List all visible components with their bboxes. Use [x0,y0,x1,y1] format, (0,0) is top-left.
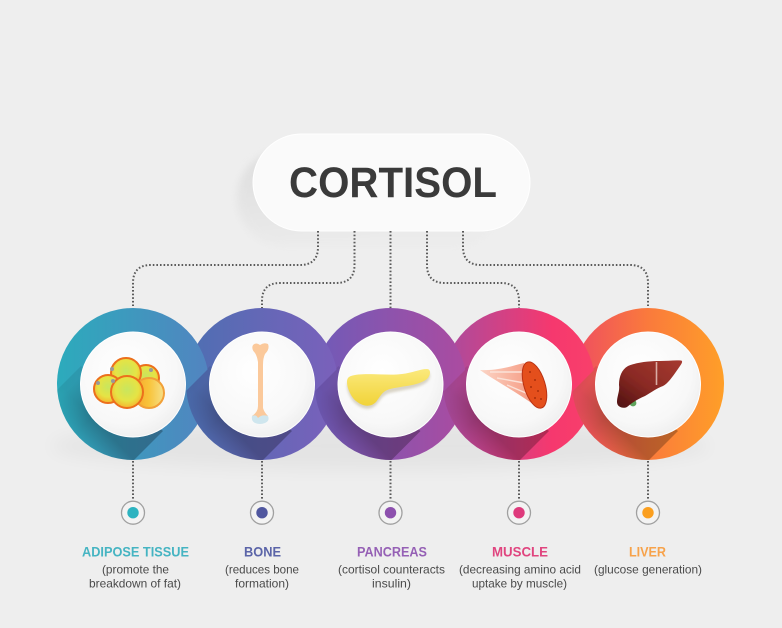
marker: pancreas [379,501,402,524]
ring: liver [572,308,724,460]
soft ground shadow below circles [50,422,710,470]
label: adipose tissue: breakdown of fat) [89,578,181,590]
ring: bone [186,308,336,460]
label: liver: (glucose generation) [594,564,702,576]
ring: pancreas [315,308,465,460]
label: pancreas: insulin) [372,578,411,590]
label: adipose tissue [82,544,189,590]
marker: adipose tissue [122,501,144,524]
label: pancreas [338,544,445,590]
icon: bone [252,343,269,424]
label: bone: BONE [244,544,281,560]
label: pancreas: (cortisol counteracts [338,564,445,576]
ring: adipose tissue [57,308,208,460]
marker: liver [636,501,660,524]
icon: muscle [480,359,552,411]
cortisol pill with long shadow [237,134,530,247]
dotted stems to markers [133,461,648,500]
label: bone [225,544,299,590]
label: liver [594,544,702,576]
label: bone: (reduces bone [225,564,299,576]
label: muscle: uptake by muscle) [472,578,567,590]
label: muscle: (decreasing amino acid [459,564,581,576]
dotted connectors from pill to circles [133,231,648,308]
label: muscle [459,544,581,590]
icon: pancreas [347,369,430,409]
marker: muscle [508,501,530,524]
label: muscle: MUSCLE [492,544,548,560]
label: liver: LIVER [629,544,666,560]
title: CORTISOL [289,159,497,207]
label: adipose tissue: ADIPOSE TISSUE [82,544,189,560]
icon: fat cells [94,358,164,408]
label: adipose tissue: (promote the [102,564,169,576]
white inner discs [80,332,700,437]
ring: muscle [444,308,594,460]
label: pancreas: PANCREAS [357,544,427,560]
label: bone: formation) [235,578,289,590]
icon: liver [617,360,682,408]
marker: bone [250,501,274,524]
